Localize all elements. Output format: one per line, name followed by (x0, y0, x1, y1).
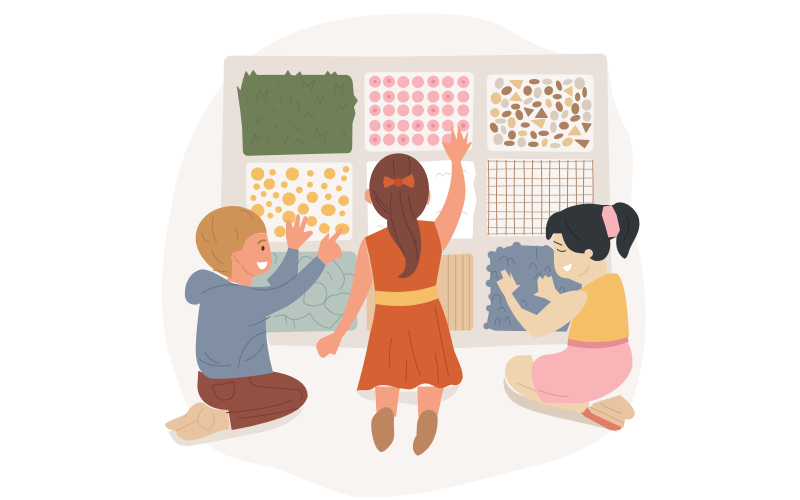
boy: ear (231, 251, 244, 264)
tile: white fluff (367, 160, 477, 239)
girl: left arm and hand (316, 237, 373, 358)
girl: closed eye, mouth, ear (554, 242, 593, 276)
boy: hair (196, 206, 267, 278)
girl: legs and feet (587, 395, 635, 429)
girl: belt (375, 285, 438, 306)
tile: pink circles (364, 72, 474, 152)
girl: yellow top (568, 273, 629, 342)
girl in red dress (316, 125, 473, 456)
boy: brow, eye, mouth (242, 240, 267, 276)
sensory board (221, 54, 613, 350)
girl: neck and face (553, 233, 607, 287)
girl: hair bow (383, 174, 414, 188)
girl: legs (375, 387, 444, 417)
girl: far hand (533, 275, 565, 305)
tile: woven grid (487, 159, 594, 237)
boy: hoodie (185, 256, 326, 379)
girl: ears (365, 187, 430, 205)
tile: grass (237, 71, 357, 155)
boy (165, 206, 343, 441)
boy: far hand (286, 214, 313, 250)
tile: wooden slats (367, 253, 473, 331)
tile: pebbles (487, 74, 594, 152)
girl: hair lines (565, 217, 629, 240)
boy: feet (165, 402, 229, 441)
girl: raised arm and hand (434, 125, 473, 252)
tile: blue fuzzy texture (483, 242, 583, 332)
girl: near arm and hand (497, 269, 587, 338)
boy: trousers (197, 371, 308, 430)
tile: yellow dots (246, 162, 353, 243)
girl: sash (567, 335, 629, 348)
girl: hair and ponytail (546, 202, 639, 261)
girl: hair and ponytail (369, 153, 429, 278)
boy: near hand (317, 228, 343, 265)
tile: sage bumpy texture (250, 251, 357, 333)
floor shadows (168, 377, 617, 446)
boy: face and neck (227, 233, 272, 287)
background blob (162, 14, 646, 497)
boy: far sleeve (267, 248, 299, 293)
girl with ponytail (497, 202, 639, 430)
girl: shoes (371, 407, 438, 456)
girl: dress (357, 220, 463, 391)
girl: scrunchie (602, 205, 620, 237)
girl: skirt (531, 340, 632, 403)
